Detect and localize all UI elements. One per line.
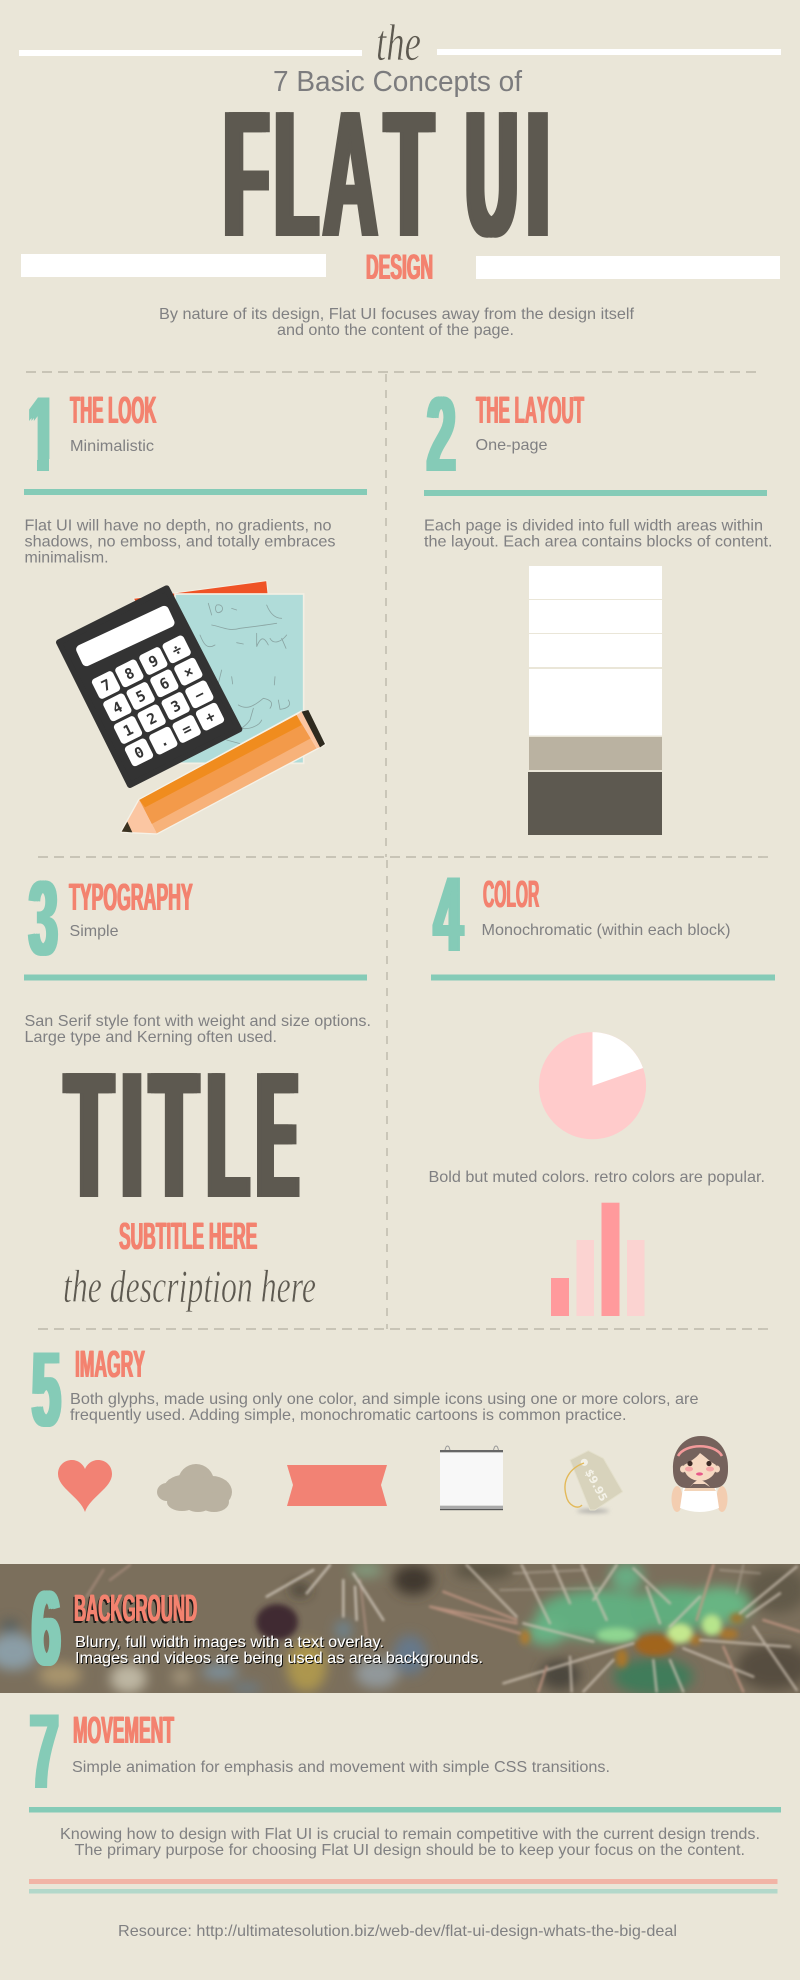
section 7 rule — [29, 1807, 781, 1812]
heading: imagry: IMAGRY — [74, 1344, 144, 1386]
header rule: top left — [19, 50, 362, 56]
section 4 body: Bold but muted colors. retro colors are popular. — [428, 1169, 765, 1186]
icon: heart — [58, 1460, 112, 1512]
type sample: TITLE: T — [150, 1035, 198, 1236]
pencil — [122, 710, 325, 833]
main title: FLAT UI: A — [323, 74, 378, 275]
closing text — [60, 1826, 760, 1859]
icon: ribbon banner — [287, 1465, 387, 1506]
calculator: + — [203, 708, 218, 727]
calculator: × — [181, 663, 196, 682]
closing text: The primary purpose for choosing Flat UI design should be to keep your focus on the content. — [74, 1842, 745, 1859]
footer rule: coral — [29, 1879, 778, 1884]
script word: the: the — [376, 15, 421, 72]
number 3: 3 — [29, 858, 58, 978]
section 1 body: Flat UI will have no depth, no gradients, no — [24, 518, 332, 534]
main title: FLAT UI: L — [275, 74, 318, 275]
section 2 rule — [424, 490, 767, 496]
heading: background: BACKGROUND — [74, 1588, 197, 1630]
section 2 body: the layout. Each area contains blocks of content. — [424, 534, 772, 550]
illustration: calculator, papers and pencil — [59, 581, 325, 833]
icon: hanging poster — [440, 1446, 503, 1510]
main title: FLAT UI: F — [224, 74, 268, 275]
heading: color: COLOR — [482, 874, 539, 916]
section 1 body: minimalism. — [24, 550, 108, 566]
calculator: . — [156, 732, 171, 751]
calculator: 9 — [146, 652, 161, 671]
section 2 subheading: One-page — [476, 437, 548, 454]
heading: movement: MOVEMENT — [73, 1710, 174, 1752]
calculator: 6 — [157, 674, 173, 694]
calculator: = — [179, 720, 195, 739]
footer rule: teal — [29, 1889, 778, 1894]
design bar right — [476, 256, 780, 279]
type sample: TITLE: L — [207, 1035, 249, 1236]
calculator: 8 — [122, 665, 137, 684]
section 3 body — [24, 1013, 371, 1046]
resource link text: Resource: http://ultimatesolution.biz/web-dev/flat-ui-design-whats-the-big-deal — [118, 1923, 677, 1940]
section 6 body overlay: Blurry, full width images with a text overlay. — [75, 1634, 384, 1651]
section 6 body overlay — [75, 1634, 483, 1667]
section 2 body — [424, 518, 772, 550]
icon: cloud — [157, 1464, 232, 1512]
calculator: 3 — [168, 697, 184, 716]
section 5 body: Both glyphs, made using only one color, and simple icons using one or more colors, are — [70, 1391, 699, 1408]
section 4 rule — [431, 974, 775, 980]
section 5 body — [70, 1391, 699, 1424]
type sample: TITLE: I — [114, 1035, 150, 1236]
calculator: 2 — [144, 710, 160, 729]
number 5: 5 — [32, 1329, 60, 1449]
heading: the look: THE LOOK — [70, 390, 156, 432]
type sample: TITLE: E — [257, 1035, 298, 1236]
number 1: 1 — [28, 374, 56, 494]
calculator: − — [192, 685, 208, 705]
header rule: top right — [437, 49, 781, 55]
design bar left — [21, 254, 326, 277]
icon: price tag: $9.95 — [582, 1467, 610, 1504]
section 6 body overlay: Images and videos are being used as area backgrounds. — [75, 1650, 483, 1667]
section 2 body: Each page is divided into full width areas within — [424, 518, 763, 534]
closing text: Knowing how to design with Flat UI is crucial to remain competitive with the current design trends. — [60, 1826, 760, 1843]
section 1 body — [24, 518, 336, 566]
heading: typography: TYPOGRAPHY — [68, 877, 192, 919]
section 7 body: Simple animation for emphasis and movement with simple CSS transitions. — [72, 1759, 610, 1776]
main title: FLAT UI — [224, 74, 557, 275]
section 3 body: San Serif style font with weight and size options. — [24, 1013, 371, 1030]
red paper — [133, 581, 269, 610]
main title: FLAT UI: T — [385, 74, 433, 275]
number 6: 6 — [32, 1568, 61, 1688]
calculator: 4 — [110, 698, 126, 718]
calculator: ÷ — [169, 640, 185, 660]
teal notepaper with scribbles — [175, 594, 304, 763]
script sample: the description here: the description here — [63, 1261, 316, 1313]
type sample: subtitle here: SUBTITLE HERE — [118, 1216, 257, 1258]
calculator: 0 — [132, 743, 147, 763]
calculator: 7 — [99, 676, 114, 695]
main title: FLAT UI: U — [466, 74, 517, 275]
layout diagram: stacked blocks — [528, 566, 662, 835]
heading: the layout: THE LAYOUT — [476, 390, 584, 432]
bar chart — [551, 1203, 644, 1316]
section 3 subheading: Simple — [70, 923, 119, 940]
section 5 body: frequently used. Adding simple, monochromatic cartoons is common practice. — [70, 1407, 626, 1424]
intro text: By nature of its design, Flat UI focuses away from the design itself — [159, 306, 635, 323]
icon: cartoon girl — [672, 1436, 728, 1512]
main title: FLAT UI: I — [519, 74, 557, 275]
type sample: TITLE — [62, 1035, 300, 1236]
intro text: and onto the content of the page. — [277, 322, 514, 339]
subtitle: 7 Basic Concepts of: 7 Basic Concepts of — [273, 66, 523, 98]
calculator — [59, 588, 239, 785]
section 1 subheading: Minimalistic — [70, 438, 154, 455]
design word: DESIGN — [366, 248, 433, 287]
icon: price tag — [565, 1451, 623, 1512]
pie chart — [539, 1032, 646, 1139]
section 3 body: Large type and Kerning often used. — [24, 1029, 277, 1046]
intro text — [159, 306, 635, 339]
section 1 body: shadows, no emboss, and totally embraces — [24, 534, 336, 550]
number 2: 2 — [427, 374, 456, 494]
section 4 subheading: Monochromatic (within each block) — [482, 922, 730, 939]
section 6 photo background: blurred cactus — [0, 1561, 800, 1695]
section 3 rule — [24, 974, 367, 980]
type sample: TITLE: T — [65, 1035, 113, 1236]
section 1 rule — [24, 489, 367, 495]
dark hole in the rock — [256, 1604, 298, 1640]
calculator: 1 — [121, 721, 136, 740]
number 7: 7 — [30, 1691, 58, 1811]
number 4: 4 — [434, 854, 462, 974]
calculator: 5 — [133, 687, 149, 706]
